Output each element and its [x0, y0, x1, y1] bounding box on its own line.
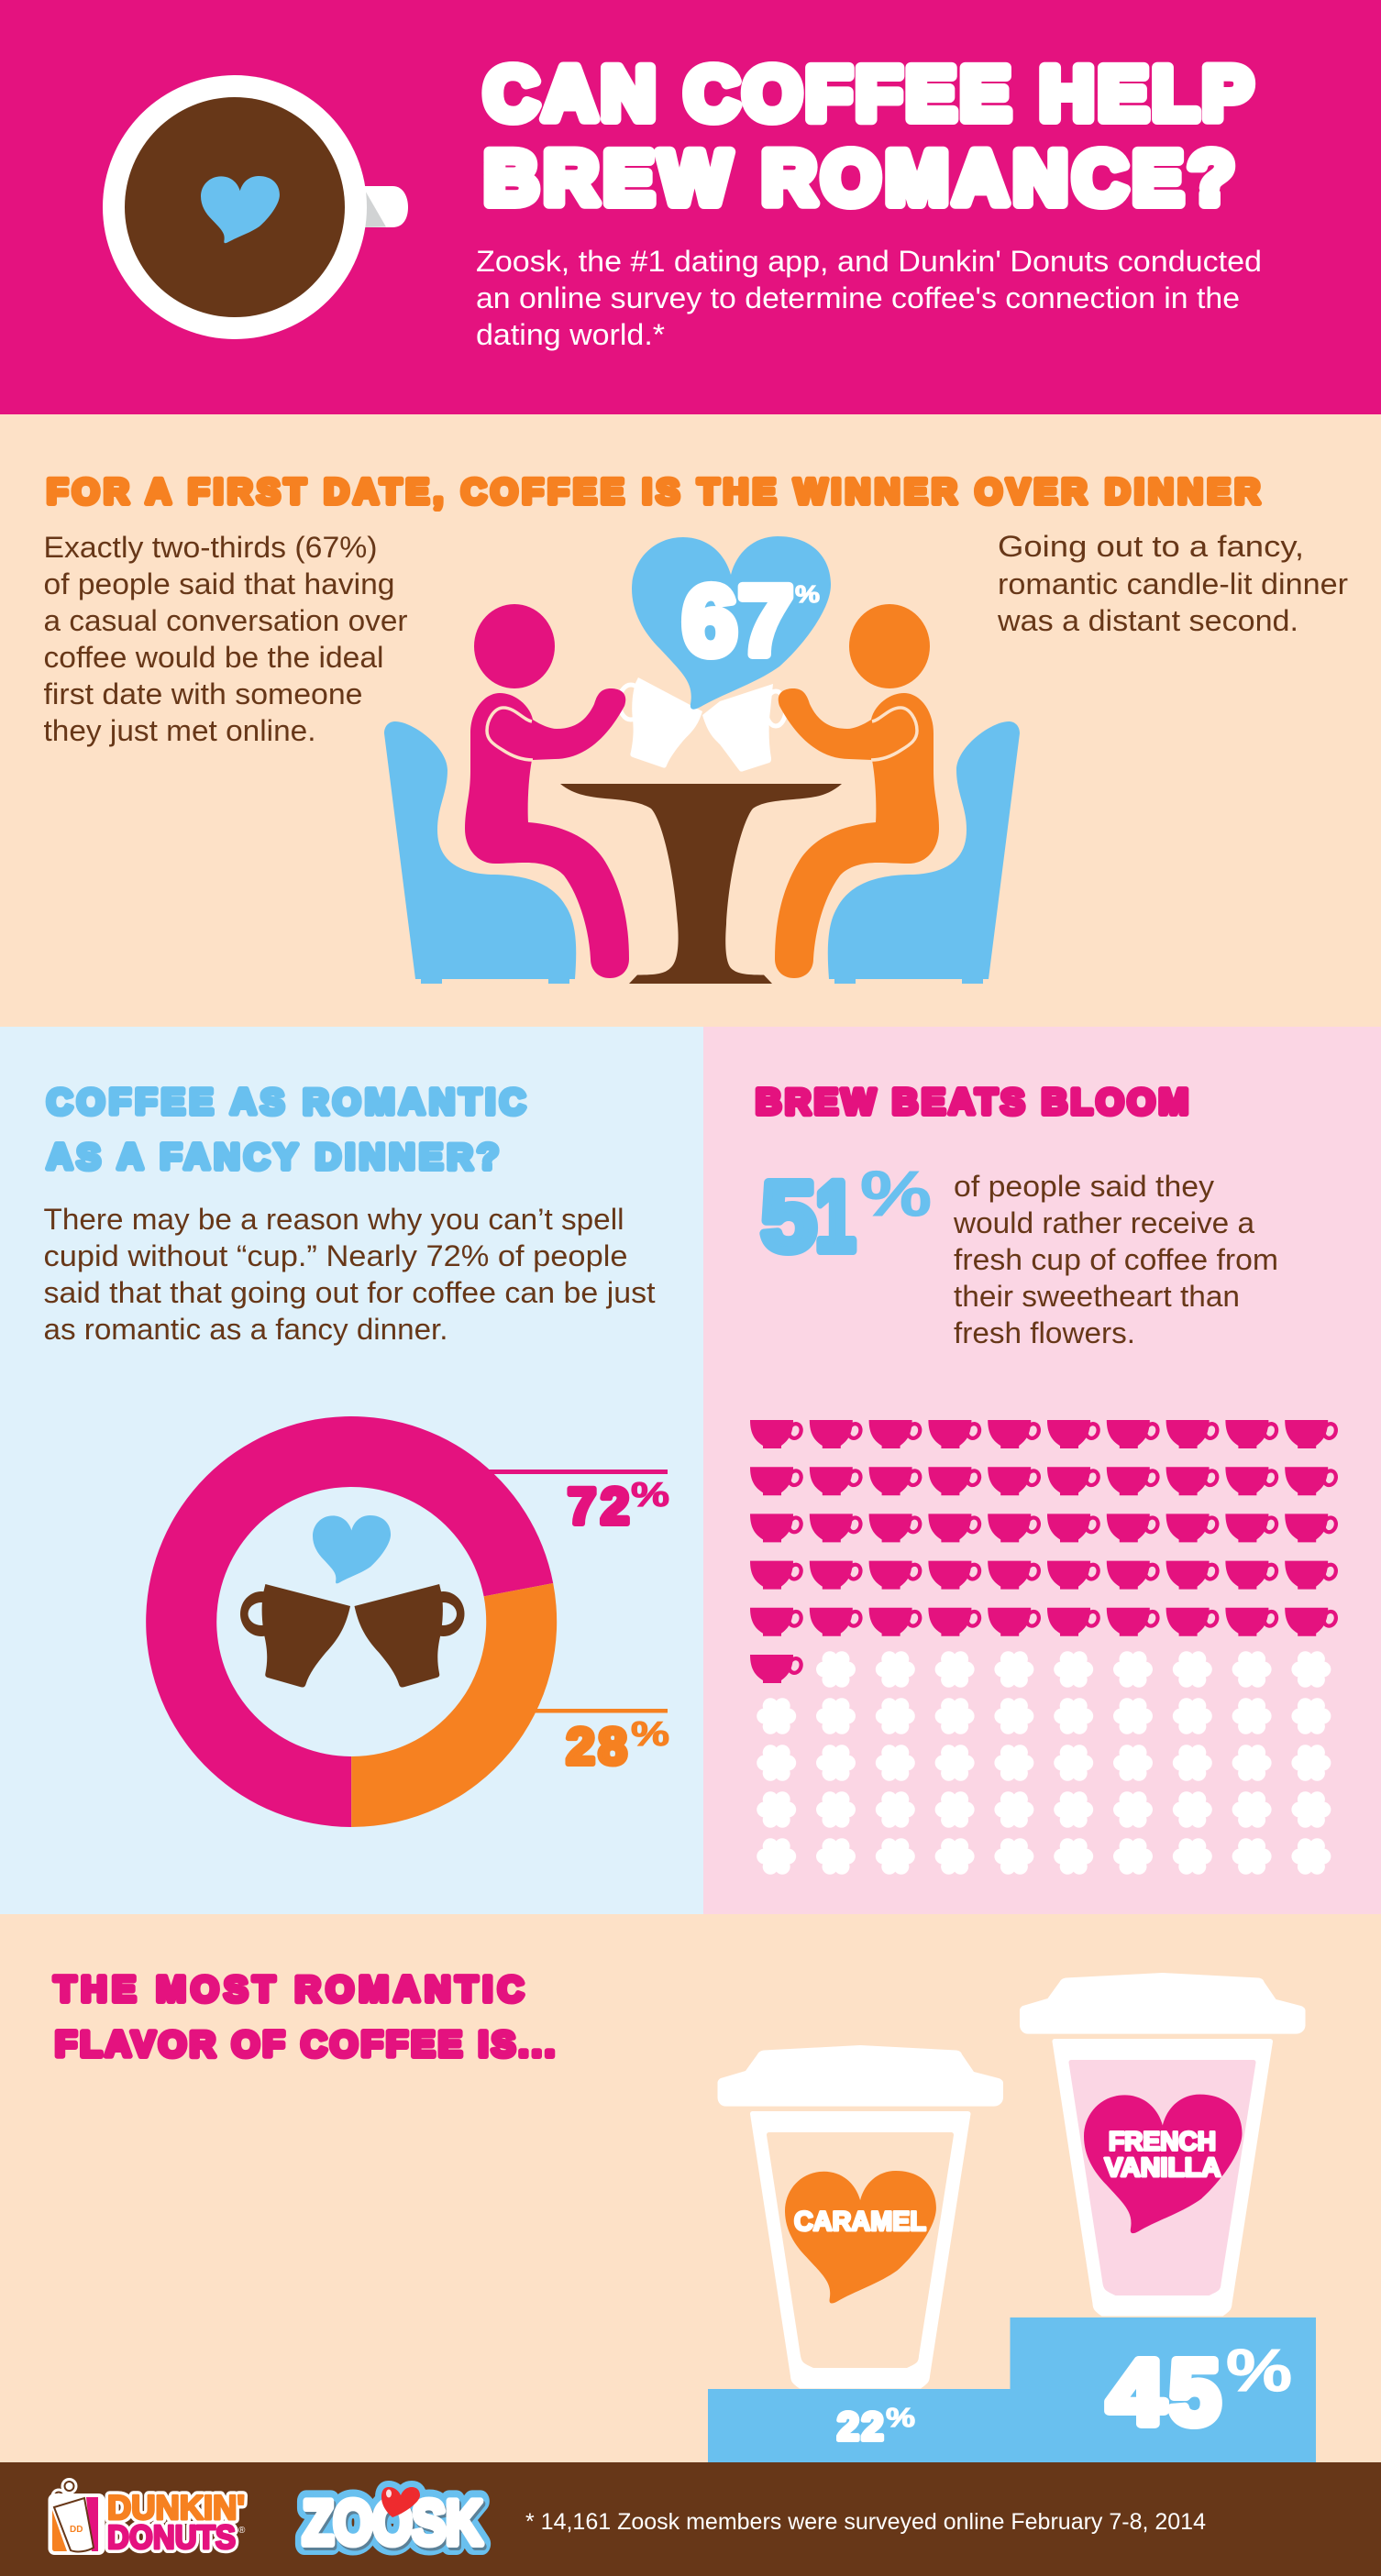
stat: 51%: 1	[815, 1161, 856, 1271]
text: coffee first date: a casual conversation over	[44, 604, 408, 637]
text: flowers vs coffee: would rather receive a	[953, 1206, 1254, 1239]
text: candle-lit dinner: romantic candle-lit dinner	[998, 567, 1348, 600]
stat: 51%: 5	[761, 1161, 816, 1271]
logo: Dunkin' Donuts: DUNKIN'	[107, 2489, 245, 2526]
text: candle-lit dinner: Going out to a fancy,	[998, 530, 1304, 563]
illustration: couple at table	[384, 604, 1020, 984]
label: 28%: 2	[567, 1717, 595, 1775]
logo: Dunkin' Donuts	[48, 2478, 246, 2556]
cup: caramel: CARAMEL	[794, 2207, 926, 2237]
panel: first date	[0, 414, 1381, 1027]
text: cupid: as romantic as a fancy dinner.	[44, 1313, 447, 1346]
stat: 22%: %	[886, 2404, 915, 2433]
icon: heart and clinking mugs	[240, 1515, 464, 1688]
footnote: * 14,161 Zoosk members were surveyed online February 7-8, 2014	[525, 2509, 1206, 2535]
text: cupid: There may be a reason why you can’t spell	[44, 1203, 624, 1236]
cup: french vanilla	[1020, 1973, 1306, 2316]
panel: brew beats bloom	[703, 1027, 1381, 1914]
heading: brew beats bloom: BREW BEATS BLOOM	[756, 1083, 1188, 1122]
chart: donut 72 / 28	[146, 1416, 669, 1827]
cup: french vanilla: VANILLA	[1104, 2153, 1221, 2183]
panel: coffee as romantic	[0, 1027, 703, 1914]
text: flowers vs coffee: their sweetheart than	[954, 1280, 1240, 1313]
intro text: Zoosk, the #1 dating app, and Dunkin' Donuts conducted	[476, 245, 1262, 278]
callout: 67% heart: 6	[682, 565, 737, 676]
stat: 22%: 2	[837, 2405, 859, 2449]
stat: 45%	[1108, 2337, 1292, 2444]
logo: Dunkin' Donuts: DUNKIN'	[107, 2489, 245, 2526]
stat: 45%: 4	[1108, 2341, 1165, 2444]
label: 72%: 2	[601, 1477, 629, 1535]
title: BREW ROMANCE?	[484, 137, 1234, 220]
intro text: dating world.*	[476, 318, 665, 351]
heading: most romantic flavor: THE MOST ROMANTIC	[54, 1970, 524, 2009]
logo: Zoosk: ZOOSK	[304, 2491, 484, 2560]
logo: Dunkin' Donuts: DONUTS	[107, 2518, 236, 2556]
heading: first date: FOR A FIRST DATE, COFFEE IS THE WINNER OVER DINNER	[47, 473, 1260, 512]
text: coffee first date: of people said that having	[44, 567, 395, 600]
panel: hero header	[0, 0, 1381, 414]
title	[484, 52, 1253, 220]
text: coffee first date: they just met online.	[44, 714, 315, 747]
text: coffee first date	[44, 531, 408, 747]
text: cupid: said that that going out for coffee can be just	[44, 1276, 656, 1309]
text: flowers vs coffee: fresh cup of coffee from	[954, 1243, 1278, 1276]
panel: most romantic flavor	[0, 1914, 1381, 2462]
text: coffee first date: first date with someone	[44, 677, 362, 710]
label: 72%	[568, 1476, 669, 1535]
text: flowers vs coffee: of people said they	[954, 1170, 1214, 1203]
logo: Zoosk: ZOOSK	[303, 2488, 482, 2558]
text: cupid	[44, 1203, 656, 1346]
intro text	[476, 245, 1262, 351]
text: flowers vs coffee: fresh flowers.	[954, 1316, 1135, 1349]
stat: 51%: %	[860, 1158, 932, 1229]
text: flowers vs coffee	[953, 1170, 1278, 1349]
text: coffee first date: Exactly two-thirds (67%)	[44, 531, 378, 564]
podium	[708, 2317, 1316, 2462]
stat: 51%	[761, 1158, 932, 1271]
stat: 22%: 2	[862, 2405, 883, 2449]
text: candle-lit dinner	[997, 530, 1348, 637]
stat: 45%: 5	[1169, 2341, 1221, 2444]
stat: 45%: %	[1226, 2337, 1292, 2404]
title: CAN COFFEE HELP	[484, 52, 1253, 136]
heading: romantic	[47, 1083, 525, 1177]
heading: most romantic flavor	[54, 1970, 555, 2064]
stat: 22%	[837, 2404, 915, 2449]
logo: Dunkin' Donuts: DD	[70, 2525, 83, 2535]
text: candle-lit dinner: was a distant second.	[997, 604, 1298, 637]
heading: romantic: COFFEE AS ROMANTIC	[47, 1083, 525, 1122]
heading: most romantic flavor: FLAVOR OF COFFEE IS...	[55, 2025, 555, 2064]
pictogram: 51 cups and 49 flowers	[750, 1420, 1338, 1875]
icon: coffee cup with heart	[103, 75, 408, 339]
text: coffee first date: coffee would be the ideal	[44, 641, 383, 674]
cup: french vanilla: FRENCH	[1109, 2127, 1216, 2156]
heading: romantic: AS A FANCY DINNER?	[47, 1138, 499, 1177]
label: 28%: 8	[598, 1717, 627, 1775]
intro text: an online survey to determine coffee's connection in the	[476, 281, 1240, 314]
text: cupid: cupid without “cup.” Nearly 72% of people	[44, 1239, 627, 1272]
logo: Dunkin' Donuts: DONUTS	[107, 2518, 236, 2556]
label: 72%: 7	[568, 1477, 596, 1535]
callout: 67% heart	[632, 536, 831, 710]
callout: 67% heart: 7	[738, 565, 793, 676]
cup: caramel	[717, 2045, 1003, 2389]
label: 28%	[567, 1715, 669, 1775]
label: 28%: %	[631, 1715, 669, 1753]
logo: Zoosk: ZOOSK	[303, 2488, 482, 2558]
logo: Dunkin' Donuts: ®	[238, 2526, 246, 2536]
callout: 67% heart: %	[795, 580, 820, 608]
label: 72%: %	[631, 1476, 669, 1514]
panel: footer	[0, 2462, 1381, 2576]
